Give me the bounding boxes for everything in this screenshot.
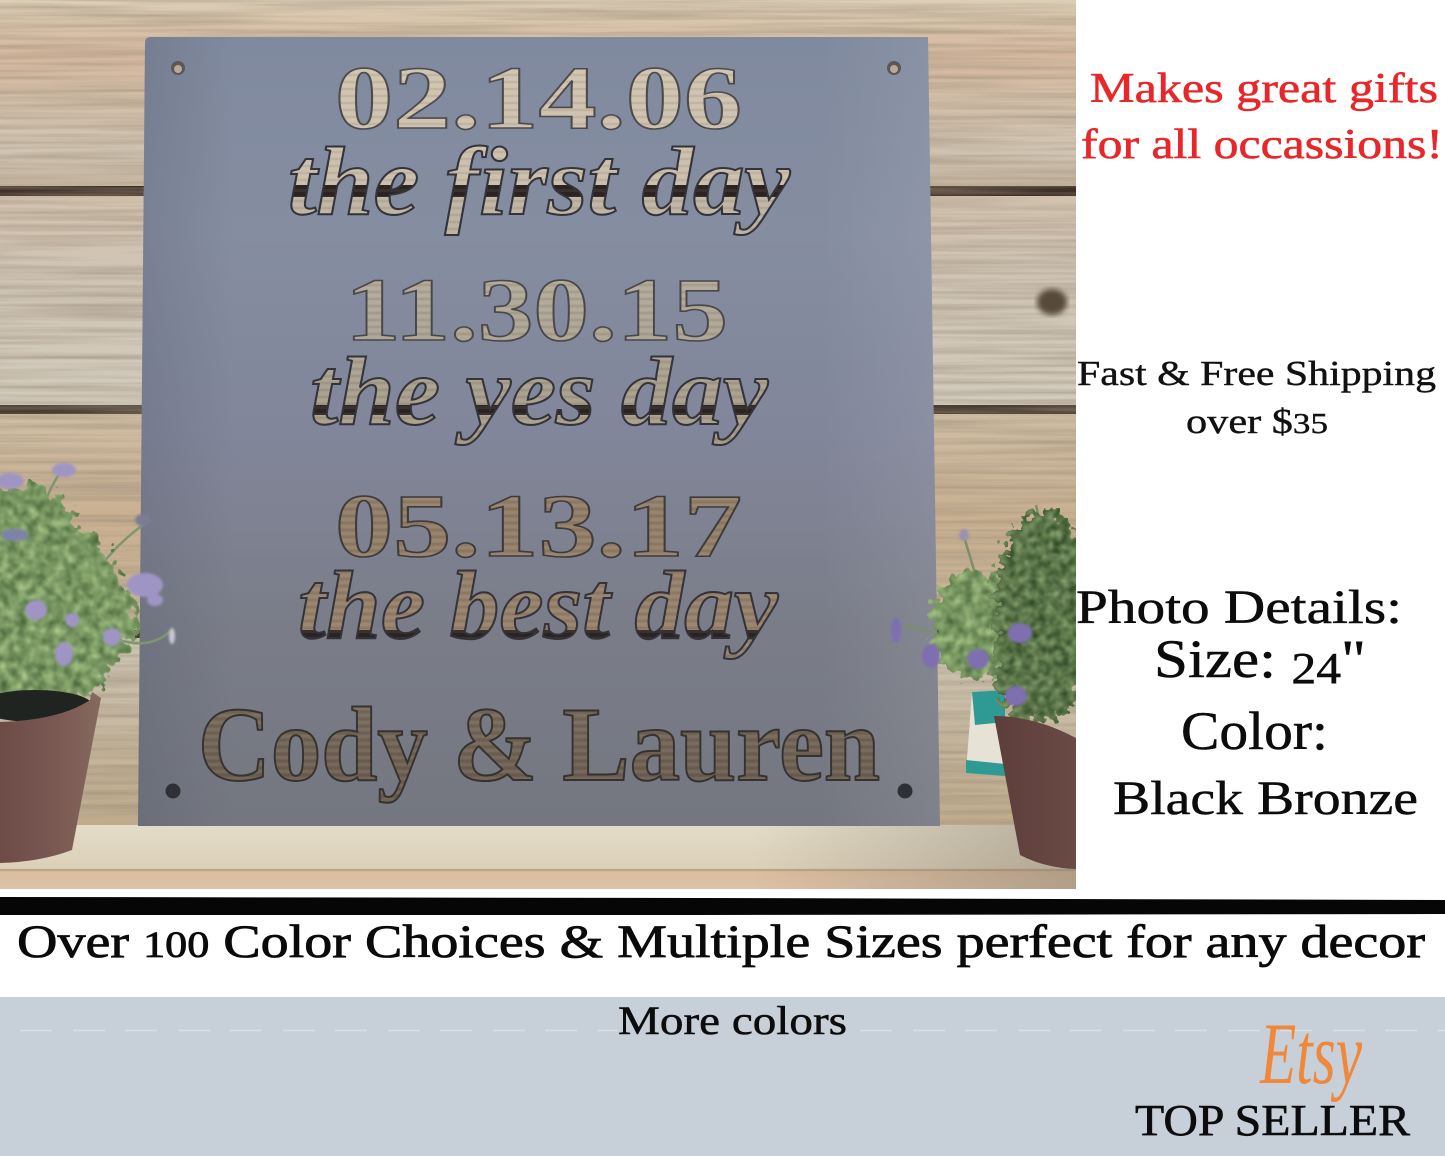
photo details block: Size: [1154, 629, 1262, 689]
red gift callout [1081, 66, 1443, 168]
wooden shelf [0, 825, 1076, 889]
flowers [0, 463, 175, 666]
left potted plant [0, 463, 175, 863]
top seller label: TOP SELLER [1135, 1096, 1411, 1145]
names: Cody & Lauren: Cody & Lauren [198, 686, 880, 803]
photo details block: Black Bronze [1113, 772, 1418, 825]
dark foliage [986, 507, 1076, 724]
script: the first day: the first day [288, 128, 791, 236]
date: 05.13.17: 05.13.17 [335, 477, 742, 576]
photo details block: Color: [1181, 701, 1328, 761]
Etsy script: Etsy [1259, 1006, 1363, 1103]
wood plank wall [0, 0, 1076, 828]
soil [0, 690, 93, 722]
shipping note: over $ 35 [1186, 402, 1328, 441]
pot [994, 716, 1076, 869]
stems [46, 474, 172, 645]
date: 02.14.06: 02.14.06 [335, 49, 742, 148]
black divider bar [0, 897, 1445, 915]
light foliage [931, 570, 1019, 680]
metal sign plate [138, 37, 940, 826]
red gift callout: for all occassions! [1081, 122, 1443, 168]
photo details block: " [1341, 629, 1366, 689]
right potted plant [891, 505, 1097, 869]
photo details block [1076, 581, 1418, 825]
product tag [966, 690, 1003, 764]
shipping note: Fast & Free Shipping [1077, 354, 1436, 393]
foliage [0, 485, 138, 715]
red gift callout: Makes great gifts [1090, 66, 1438, 112]
more colors label: More colors [618, 998, 847, 1043]
pot [0, 692, 101, 863]
mounting holes [166, 61, 912, 798]
stems [905, 505, 1042, 640]
grey colours panel [0, 997, 1445, 1156]
photo details block: 24 [1291, 644, 1341, 693]
date: 11.30.15: 11.30.15 [345, 261, 728, 360]
script: the best day: the best day [298, 552, 779, 660]
shipping note [1077, 354, 1436, 441]
product photo [0, 0, 1097, 889]
colour choices headline: Over 100 Color Choices & Multiple Sizes perfect for any decor [17, 916, 1425, 968]
script: the yes day: the yes day [310, 338, 769, 446]
photo details block: Photo Details: [1076, 581, 1402, 634]
flowers [891, 529, 1032, 706]
